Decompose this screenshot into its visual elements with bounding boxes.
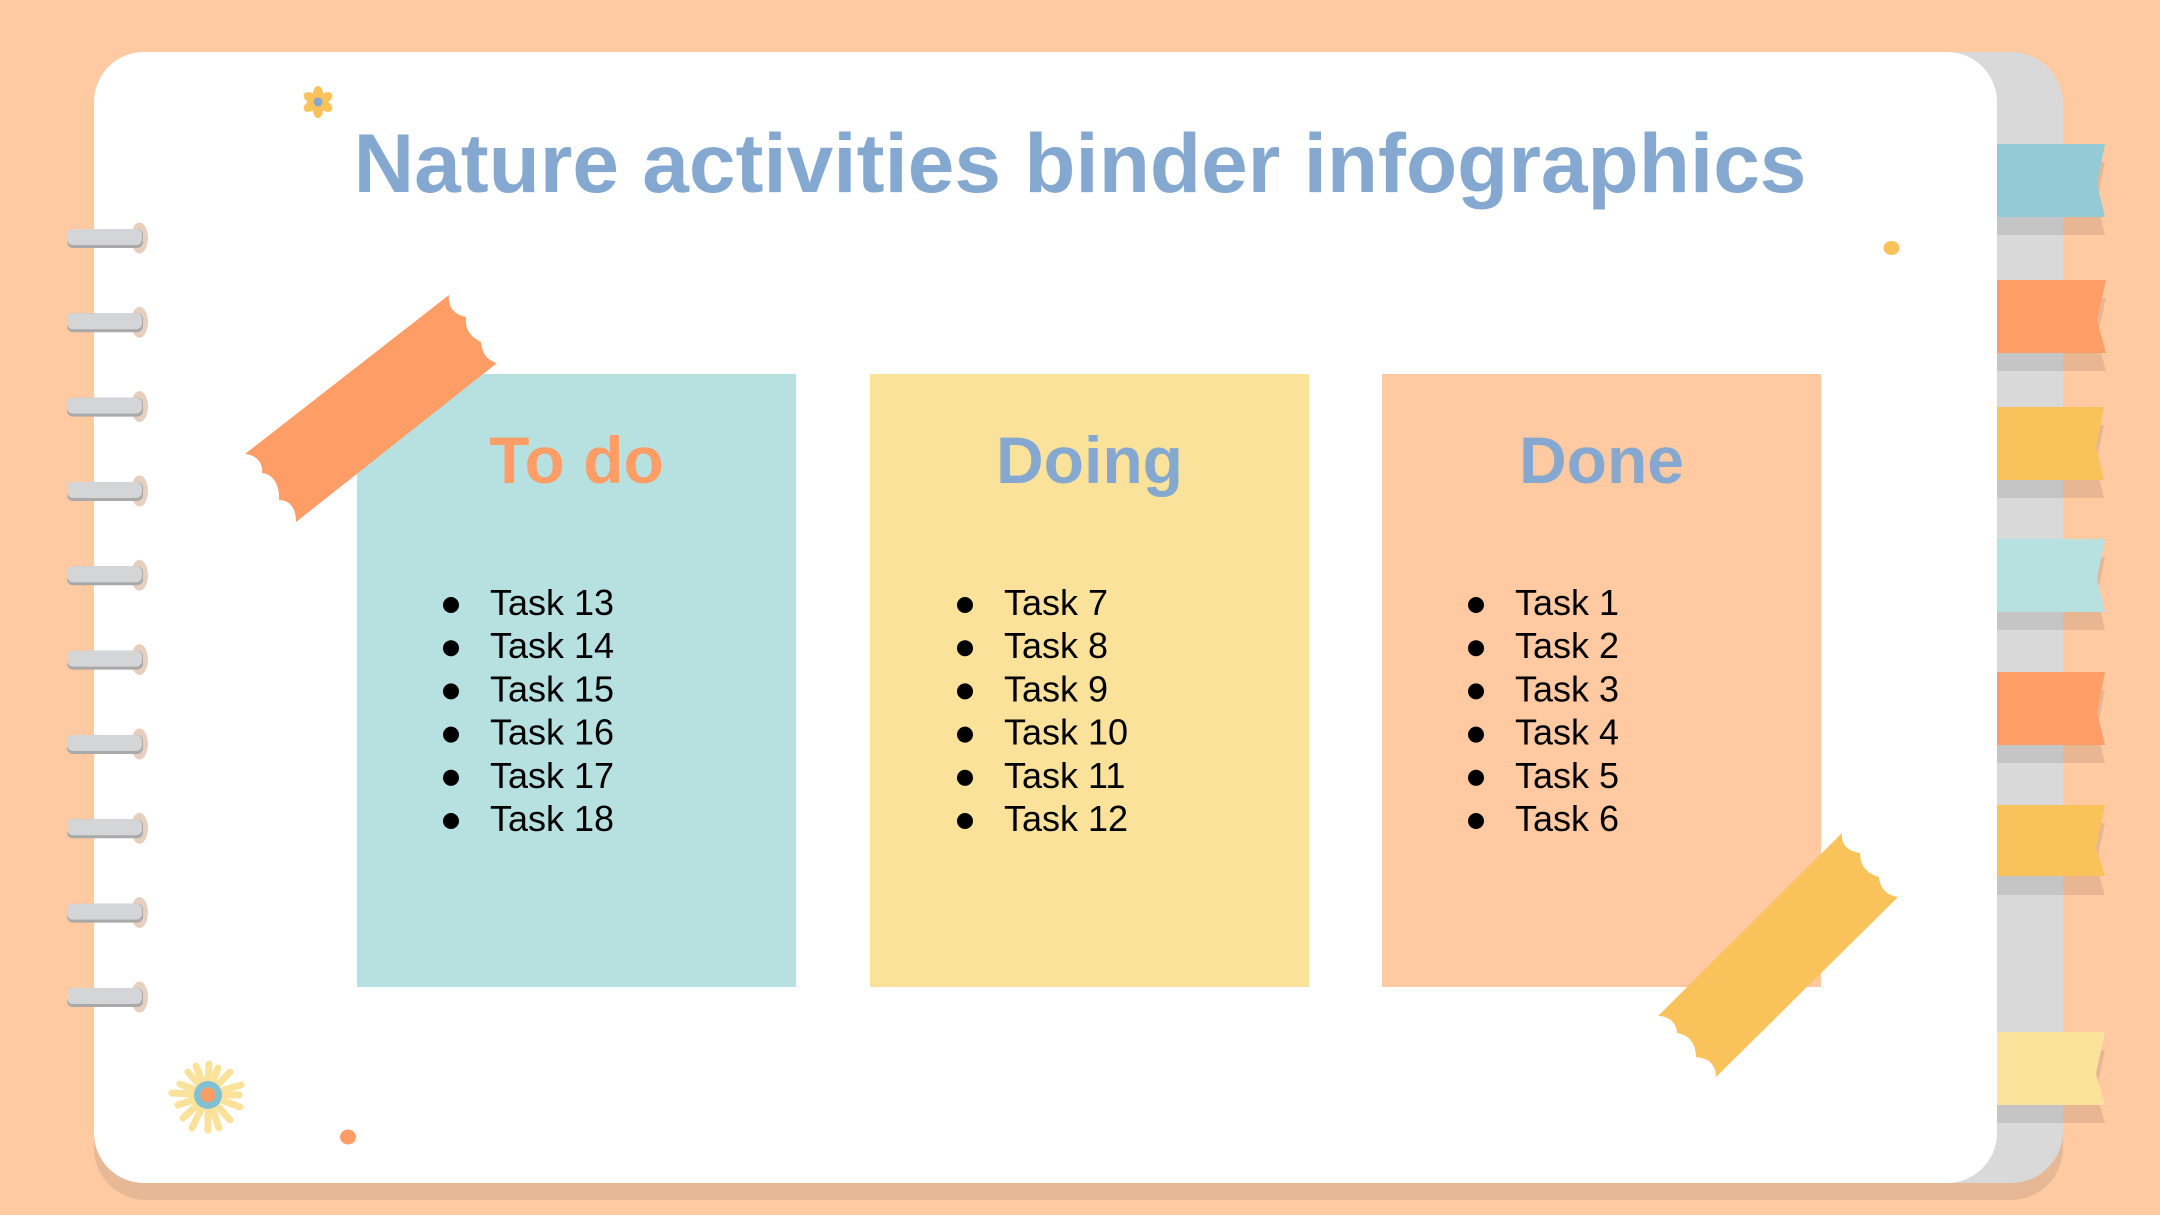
panel: done xyxy=(1382,374,1821,987)
binder rings xyxy=(67,222,148,1012)
done task list: Task 1 xyxy=(1515,582,1619,623)
to do task list: Task 13 xyxy=(490,582,614,623)
doing card xyxy=(870,374,1309,987)
title: Nature activities binder infographics xyxy=(354,116,1806,210)
done task list: Task 3 xyxy=(1515,668,1619,709)
done task list xyxy=(1468,582,1619,839)
panel: doing xyxy=(870,374,1309,987)
doing task list: Task 9 xyxy=(1004,668,1108,709)
doing task list: Task 10 xyxy=(1004,712,1128,753)
done task list: Task 5 xyxy=(1515,755,1619,796)
tab: cream xyxy=(1996,1032,2105,1123)
washi tape: orange xyxy=(245,295,497,522)
tab: light teal xyxy=(1996,539,2105,630)
to do task list: Task 17 xyxy=(490,755,614,796)
to do task list: Task 16 xyxy=(490,712,614,753)
washi tape: yellow xyxy=(1658,833,1898,1077)
doing task list: Task 12 xyxy=(1004,798,1128,839)
to do task list: Task 18 xyxy=(490,798,614,839)
tab dividers xyxy=(1996,144,2106,1123)
decorative dot: yellow xyxy=(1884,241,1900,255)
icon: daisy xyxy=(172,1064,241,1130)
panel: to do xyxy=(357,374,796,987)
tab: teal xyxy=(1996,144,2105,235)
to do task list: Task 15 xyxy=(490,668,614,709)
tab: yellow xyxy=(1996,407,2104,498)
doing task list: Task 8 xyxy=(1004,625,1108,666)
doing task list: Task 7 xyxy=(1004,582,1108,623)
done task list: Task 6 xyxy=(1515,798,1619,839)
to do card xyxy=(357,374,796,987)
to do task list: Task 14 xyxy=(490,625,614,666)
doing task list: Task 11 xyxy=(1004,755,1125,796)
tab: orange 2 xyxy=(1996,672,2105,763)
icon: small flower xyxy=(302,86,334,118)
doing heading: Doing xyxy=(996,423,1183,497)
tab: orange xyxy=(1996,280,2106,371)
done heading: Done xyxy=(1519,423,1684,497)
to do task list xyxy=(443,582,614,839)
to do heading: To do xyxy=(489,423,664,497)
decorative dot: orange xyxy=(340,1130,356,1144)
done card xyxy=(1382,374,1821,987)
done task list: Task 4 xyxy=(1515,712,1619,753)
doing task list xyxy=(957,582,1128,839)
tab: yellow 2 xyxy=(1996,805,2105,895)
done task list: Task 2 xyxy=(1515,625,1619,666)
